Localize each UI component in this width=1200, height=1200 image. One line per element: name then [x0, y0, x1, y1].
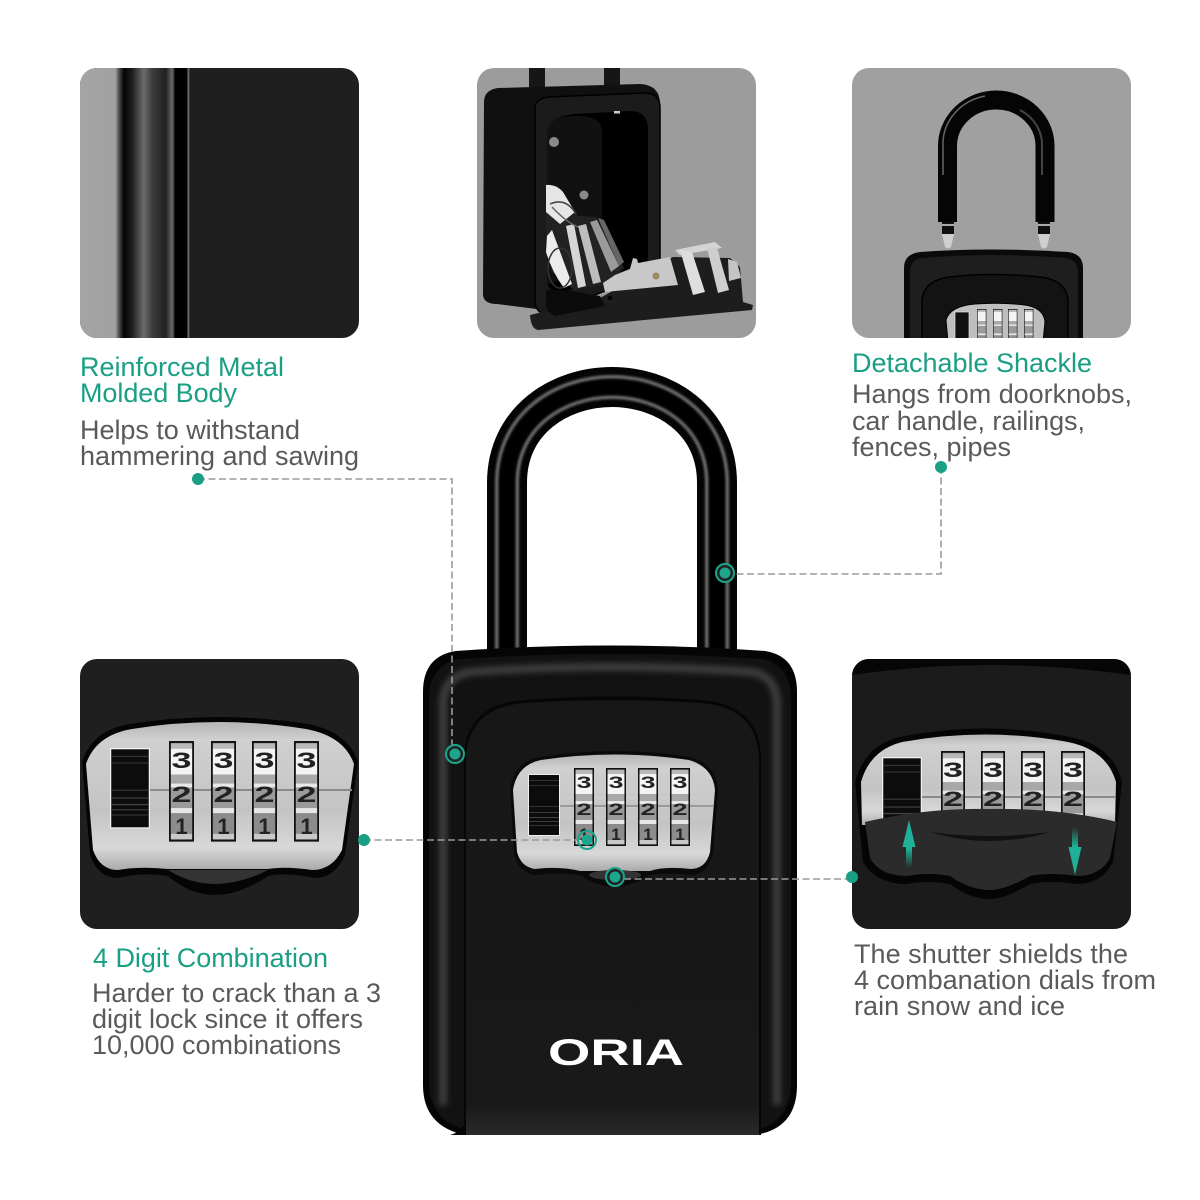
panel: 4 digit dial close-up: 1	[258, 814, 271, 839]
text: harder to crack: 10,000 combinations	[92, 1030, 341, 1060]
window with dials: 2	[576, 800, 592, 819]
icon: bunch of keys	[546, 185, 624, 290]
panel: 4 digit dial close-up: 1	[217, 814, 230, 839]
callout: body connector	[192, 473, 464, 763]
panel: shutter close-up	[852, 659, 1131, 929]
panel: 4 digit dial close-up: 1	[300, 814, 313, 839]
text: hangs from doorknobs	[852, 379, 1132, 462]
window with dials	[510, 751, 718, 887]
panel: 4 digit dial close-up: 3	[254, 748, 274, 773]
panel: shutter close-up: 3	[1063, 759, 1083, 782]
panel: shutter close-up: 3	[1023, 759, 1043, 782]
text: helps to withstand: hammering and sawing	[80, 441, 359, 471]
panel: 4 digit dial close-up: 3	[172, 748, 192, 773]
window with dials: 3	[608, 773, 624, 792]
heading: reinforced metal molded body	[80, 352, 284, 408]
window with dials: 3	[576, 773, 592, 792]
panel: 4 digit dial close-up: 2	[172, 782, 192, 807]
panel: 4 digit dial close-up: 3	[214, 748, 234, 773]
window with dials: 3	[640, 773, 656, 792]
icon: up arrow	[902, 820, 916, 868]
shackle	[507, 387, 717, 654]
body	[423, 646, 797, 1135]
window with dials: 1	[675, 825, 685, 844]
heading: detachable shackle: Detachable Shackle	[852, 348, 1092, 378]
window with dials: 1	[643, 825, 653, 844]
panel: shutter close-up: 2	[1023, 788, 1043, 811]
callout: dial connector	[358, 831, 596, 849]
text: helps to withstand	[80, 415, 359, 471]
callout: shutter connector	[606, 868, 858, 886]
text: shutter shields dials: 4 combanation dials from	[854, 965, 1156, 995]
text: harder to crack	[92, 978, 381, 1060]
text: hangs from doorknobs: car handle, railings,	[852, 406, 1085, 436]
panel: shutter close-up: 2	[983, 788, 1003, 811]
text: shutter shields dials: rain snow and ice	[854, 991, 1065, 1021]
text: hangs from doorknobs: Hangs from doorknobs,	[852, 379, 1132, 409]
heading: reinforced metal molded body: Reinforced Metal	[80, 352, 284, 382]
panel: 4 digit dial close-up: 2	[254, 782, 274, 807]
panel: open lock box with keys	[477, 66, 756, 338]
panel: 4 digit dial close-up: 2	[296, 782, 316, 807]
callout: shackle connector	[716, 461, 947, 582]
panel: detachable shackle	[852, 68, 1131, 346]
text: hangs from doorknobs: fences, pipes	[852, 432, 1011, 462]
panel: reinforced metal body close-up	[80, 68, 359, 338]
window with dials: 3	[672, 773, 688, 792]
text: shutter shields dials: The shutter shields the	[854, 939, 1128, 969]
window with dials: 1	[611, 825, 621, 844]
text: helps to withstand: Helps to withstand	[80, 415, 300, 445]
window with dials: 2	[640, 800, 656, 819]
window with dials: 1	[579, 825, 589, 844]
main product: lock box	[423, 387, 797, 1135]
panel: 4 digit dial close-up	[80, 659, 359, 929]
heading: 4 digit combination: 4 Digit Combination	[93, 943, 328, 973]
panel: shutter close-up: 2	[1063, 788, 1083, 811]
panel: 4 digit dial close-up: 1	[175, 814, 188, 839]
panel: 4 digit dial close-up: 3	[296, 748, 316, 773]
text: harder to crack: digit lock since it offers	[92, 1004, 363, 1034]
shutter	[865, 809, 1117, 890]
window with dials: 2	[608, 800, 624, 819]
panel: shutter close-up: 3	[943, 759, 963, 782]
window with dials: 2	[672, 800, 688, 819]
door open with tray	[530, 185, 753, 330]
text: shutter shields dials	[854, 939, 1156, 1021]
text: harder to crack: Harder to crack than a 3	[92, 978, 381, 1008]
heading: reinforced metal molded body: Molded Body	[80, 378, 238, 408]
icon: down arrow	[1068, 827, 1082, 875]
panel: shutter close-up: 3	[983, 759, 1003, 782]
logo: ORIA: ORIA	[548, 1032, 684, 1073]
panel: shutter close-up: 2	[943, 788, 963, 811]
panel: 4 digit dial close-up: 2	[214, 782, 234, 807]
